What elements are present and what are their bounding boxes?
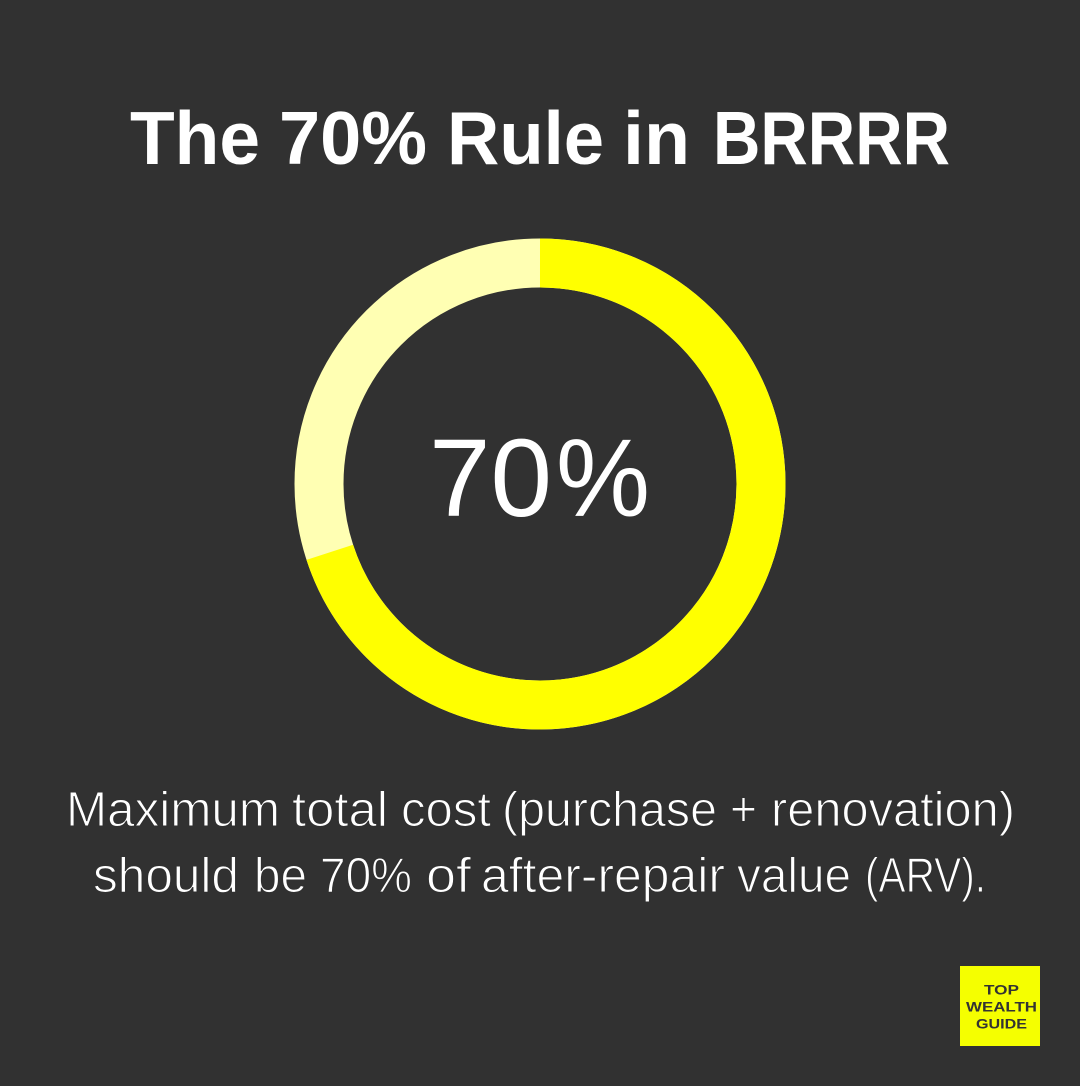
center value: 70	[429, 417, 552, 540]
title: Rule	[447, 96, 604, 180]
description: +	[730, 783, 757, 837]
logo: Top Wealth Guide: GUIDE	[976, 1016, 1027, 1032]
description: cost	[401, 783, 491, 837]
title: 70%	[279, 96, 427, 180]
description: (purchase	[502, 783, 717, 837]
highlighted 70% segment	[330, 263, 761, 705]
center value: %	[556, 417, 650, 540]
title	[130, 96, 950, 180]
donut chart: 70%	[319, 263, 761, 705]
logo: Top Wealth Guide: WEALTH	[966, 1000, 1037, 1014]
description: of	[426, 849, 471, 903]
center value	[429, 417, 650, 540]
description: be	[254, 849, 307, 903]
logo: Top Wealth Guide: TOP	[984, 982, 1019, 998]
remaining 30% segment	[319, 263, 761, 705]
description: total	[292, 783, 388, 837]
title: The	[130, 96, 260, 180]
description: after-repair	[481, 849, 725, 903]
description	[66, 783, 1015, 903]
description: (ARV).	[865, 849, 986, 903]
title: BRRRR	[713, 96, 950, 180]
description: value	[737, 849, 851, 903]
description: should	[93, 849, 239, 903]
logo: Top Wealth Guide	[960, 966, 1040, 1046]
description: Maximum	[66, 783, 280, 837]
title: in	[623, 96, 690, 180]
description: renovation)	[771, 783, 1015, 837]
description: 70%	[320, 849, 412, 903]
